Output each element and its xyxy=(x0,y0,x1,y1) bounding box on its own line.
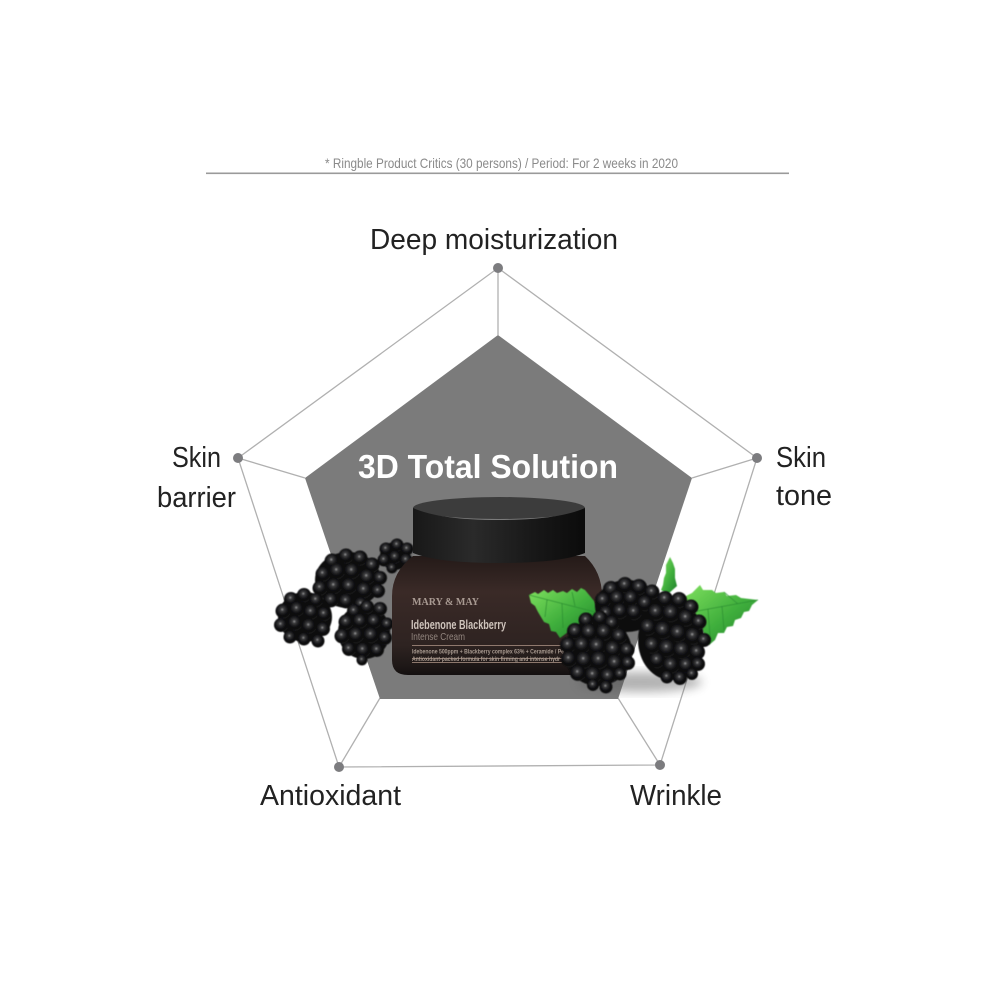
label: antioxidant: Antioxidant xyxy=(260,780,401,812)
label: skin barrier: barrier xyxy=(157,482,236,514)
label: deep moisturization: Deep moisturization xyxy=(370,224,618,256)
label: skin barrier: Skin xyxy=(172,442,221,474)
label: skin tone xyxy=(776,442,832,512)
radar axes xyxy=(238,268,757,767)
radar chart xyxy=(233,263,762,772)
label: skin tone: Skin xyxy=(776,442,826,474)
vertex dots xyxy=(233,263,762,772)
outer pentagon grid xyxy=(238,268,757,767)
label: wrinkle: Wrinkle xyxy=(630,780,722,812)
jar sub name: Intense Cream xyxy=(411,631,465,643)
footnote: * Ringble Product Critics (30 persons) / Period: For 2 weeks in 2020 xyxy=(325,155,678,171)
jar description: Antioxidant-packed formula for skin firming and intense hydr xyxy=(412,657,561,663)
top leaf xyxy=(661,557,677,594)
chart title: 3D Total Solution xyxy=(358,448,618,485)
green leaves xyxy=(529,557,758,645)
jar ingredients: Idebenone 500ppm + Blackberry complex 63% + Ceramide / Pe xyxy=(412,650,565,656)
left leaf xyxy=(529,588,597,638)
label: skin barrier xyxy=(157,442,236,514)
jar lid xyxy=(413,497,585,563)
jar body xyxy=(392,556,602,675)
inner grey pentagon xyxy=(305,335,692,699)
product jar xyxy=(392,497,602,675)
jar rules xyxy=(412,645,562,663)
right blackberries xyxy=(560,577,711,694)
jar brand: MARY & MAY xyxy=(412,596,479,608)
left blackberries xyxy=(274,538,414,666)
berry shadow xyxy=(578,672,702,692)
leaf veins xyxy=(529,592,758,636)
header rule xyxy=(206,172,789,174)
jar product name: Idebenone Blackberry xyxy=(411,618,506,632)
label: skin tone: tone xyxy=(776,480,832,512)
right leaf xyxy=(684,585,758,645)
